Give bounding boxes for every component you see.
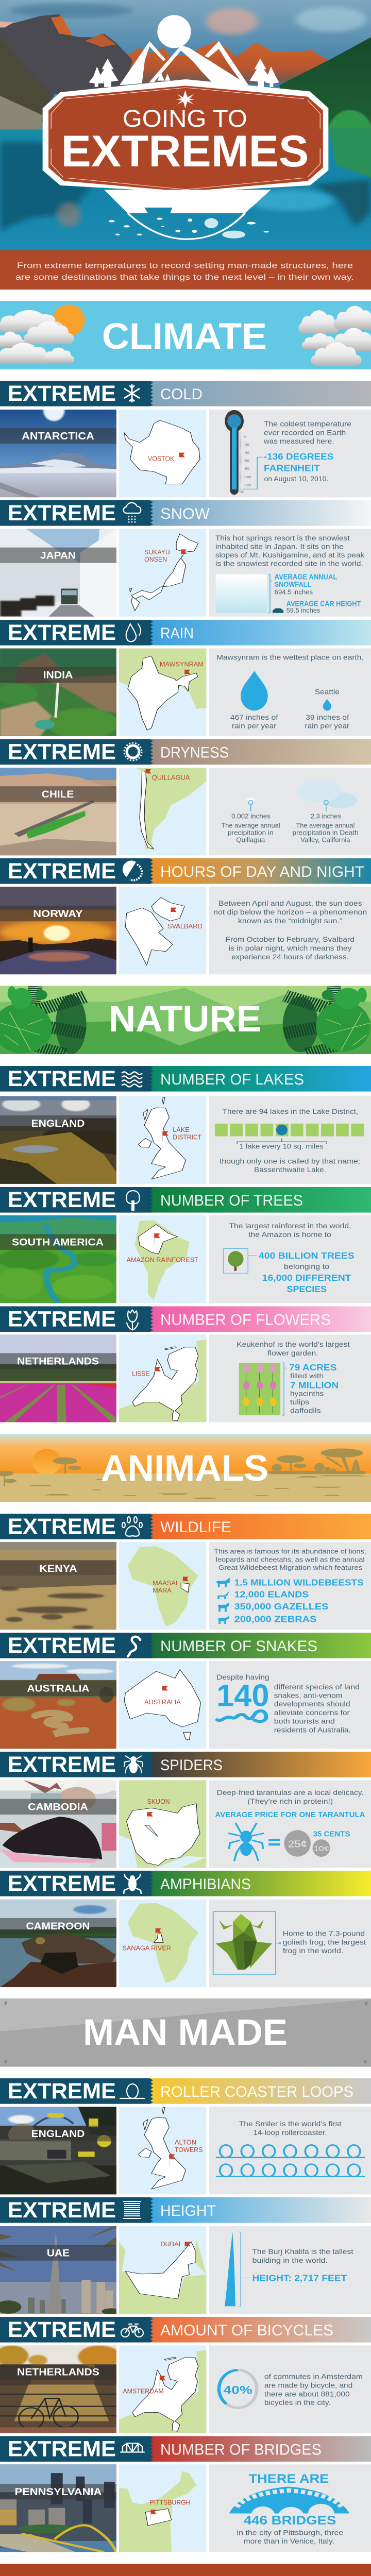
panel: spiders: 35 CENTS <box>313 1829 350 1838</box>
heading: Climate: CLIMATE <box>102 316 267 357</box>
band: extreme cold: EXTREME <box>8 381 116 406</box>
panel: coldest temperature: ever recorded on Earth <box>264 429 346 437</box>
band: extreme roller coaster loops: EXTREME <box>8 2079 116 2104</box>
bracket <box>237 1138 327 1144</box>
band: extreme snow <box>0 500 371 526</box>
snow depth bar <box>216 574 267 613</box>
panel: coldest temperature: -136 DEGREES <box>264 452 333 462</box>
photo: Antarctica: ANTARCTICA <box>22 430 94 442</box>
row: Kenya <box>0 1541 371 1630</box>
intro text band: are some destinations that take things to the next level – in their own way. <box>15 273 354 282</box>
band: extreme amphibians <box>0 1871 371 1896</box>
panel: snakes: developments should <box>274 1700 350 1708</box>
band: extreme cold <box>0 381 371 406</box>
garden plot <box>239 1363 287 1415</box>
band: extreme height <box>0 2197 371 2223</box>
row: Norway <box>0 887 371 975</box>
thermometer chart: -80 <box>244 467 249 470</box>
photo: rollercoaster: ENGLAND <box>31 2128 85 2139</box>
band: extreme dryness <box>0 739 371 765</box>
panel: snakes: alleviate concerns for <box>274 1709 350 1717</box>
band: extreme number of snakes <box>0 1633 371 1658</box>
photo: UAE: UAE <box>47 2247 70 2258</box>
band: extreme wildlife: EXTREME <box>8 1514 116 1539</box>
photo: England <box>0 1096 116 1184</box>
row: England rollercoaster <box>0 2107 371 2194</box>
icon: setting sun <box>32 1449 61 1475</box>
icon: snow cloud <box>123 503 141 524</box>
bracket <box>268 574 272 613</box>
photo: Antarctica <box>0 410 116 498</box>
panel: flowers: daffodils <box>290 1406 321 1415</box>
plants: right <box>283 986 371 1053</box>
map: Lisse <box>119 1334 206 1422</box>
row: Chile <box>0 768 371 855</box>
row: Netherlands flowers <box>0 1334 371 1422</box>
thermometer chart: -20 <box>244 444 249 447</box>
band: extreme hours of day and night: EXTREME <box>8 859 116 884</box>
panel: snakes: 140 <box>216 1679 269 1713</box>
photo: Norway: NORWAY <box>33 908 83 919</box>
band: extreme rain <box>0 620 371 646</box>
photo: Chile: CHILE <box>42 789 74 800</box>
panel: wettest place <box>209 648 371 736</box>
band: extreme amphibians: AMPHIBIANS <box>160 1876 251 1893</box>
map: India <box>119 648 206 736</box>
panel: driest place: 2.3 inches <box>311 813 341 820</box>
chart: 40 percent ring: 40% <box>223 2383 252 2396</box>
icon: truss bridge <box>121 2443 144 2452</box>
panel: flowers: filled with <box>290 1373 324 1380</box>
icon: tree <box>126 1191 140 1211</box>
icon: coins: 10¢ <box>313 1844 329 1853</box>
icons: wildlife silhouettes <box>216 1578 230 1624</box>
panel: snowiest site <box>209 529 371 617</box>
photo: Japan: JAPAN <box>40 550 76 561</box>
icon: small drop <box>323 699 331 711</box>
icon: sun <box>53 304 85 336</box>
band: extreme roller coaster loops: ROLLER COASTER LOOPS <box>160 2083 353 2100</box>
panel: snowiest site: 59.5 inches <box>286 607 320 614</box>
panel: flowers: 79 ACRES <box>289 1363 336 1372</box>
map: Dubai <box>119 2226 206 2314</box>
icon: tulip <box>127 1310 138 1330</box>
panel: driest place: 0.002 inches <box>231 813 271 820</box>
panel: bicycles <box>209 2345 371 2433</box>
band: extreme number of trees: EXTREME <box>8 1188 116 1212</box>
icon: snowflake <box>124 384 140 402</box>
chart: 14 loops <box>216 2145 365 2177</box>
band: extreme rain: EXTREME <box>8 620 116 645</box>
panel: snakes: both tourists and <box>274 1717 335 1725</box>
photo: Cameroon: CAMEROON <box>26 1920 90 1931</box>
chart: ten squares <box>215 1124 364 1137</box>
map: Antarctica: VOSTOK <box>148 455 175 463</box>
map: Skuon <box>119 1780 206 1868</box>
panel: bicycles: bicycles in the city. <box>264 2398 331 2406</box>
icon: snake <box>128 1637 140 1656</box>
panel: coldest temperature: on August 10, 2010. <box>264 474 328 483</box>
callout line <box>276 1942 281 1944</box>
panel: snakes: residents of Australia. <box>274 1726 351 1734</box>
band: extreme wildlife: WILDLIFE <box>160 1519 231 1536</box>
panel: trees: 16,000 DIFFERENT <box>262 1273 351 1283</box>
map: Maasai Mara: MAASAI <box>153 1580 177 1587</box>
panel: flowers: hyacinths <box>290 1389 324 1398</box>
map: Antarctica <box>119 410 206 498</box>
section banner: Animals <box>0 1434 371 1502</box>
panel: driest place: Valley, California <box>300 837 350 844</box>
band: extreme dryness: DRYNESS <box>160 744 229 761</box>
panel: bridges: THERE ARE <box>249 2472 329 2486</box>
band: extreme number of lakes: NUMBER OF LAKES <box>160 1071 304 1088</box>
map: Japan <box>119 529 206 617</box>
hero: mountain lake photo with badge <box>0 0 371 250</box>
row: Amsterdam <box>0 2345 371 2433</box>
panel: trees: the Amazon is home to <box>248 1230 331 1239</box>
icon: sun ring <box>124 743 142 760</box>
band: extreme dryness: EXTREME <box>8 740 116 765</box>
band: extreme cold: COLD <box>160 386 203 403</box>
panel: bridges: in the city of Pittsburgh, three <box>237 2529 343 2537</box>
clouds: right <box>298 306 371 366</box>
photo: Amsterdam <box>0 2345 121 2433</box>
panel: bridges <box>209 2464 371 2552</box>
title: Going to: GOING TO <box>123 105 247 132</box>
icon: bicycle <box>121 2324 143 2337</box>
section banner: Miscellaneous <box>0 2564 371 2576</box>
panel: wildlife: 12,000 ELANDS <box>234 1589 309 1600</box>
equals sign <box>268 1839 280 1845</box>
panel: wettest place: Seattle <box>315 688 340 696</box>
photo: Pittsburgh <box>0 2464 116 2552</box>
section banner: Climate <box>0 301 371 369</box>
icon: rain gauges <box>249 800 328 811</box>
photo: Australia <box>0 1661 116 1749</box>
section banner: Man Made <box>0 1998 371 2067</box>
icon: low-poly frog in box <box>213 1911 276 1974</box>
icon: compass star <box>176 90 194 108</box>
photo: Amsterdam: NETHERLANDS <box>17 2366 99 2378</box>
panel: height: building in the world. <box>252 2256 328 2264</box>
icon: building <box>123 2201 141 2218</box>
band: extreme height: EXTREME <box>8 2198 116 2223</box>
panel: height <box>209 2226 371 2314</box>
panel: midnight sun <box>209 887 371 974</box>
panel: trees: SPECIES <box>287 1284 327 1294</box>
map: Japan: SUKAYU <box>144 549 170 556</box>
icon: tarantula <box>228 1823 264 1861</box>
band: extreme spiders: EXTREME <box>8 1752 116 1777</box>
panel: bicycles: there are about 881,000 <box>264 2390 350 2398</box>
band: extreme snow: EXTREME <box>8 501 116 526</box>
map: Lake District: LAKE <box>173 1126 190 1133</box>
band: extreme spiders <box>0 1752 371 1777</box>
band: extreme number of snakes: NUMBER OF SNAKES <box>160 1638 317 1655</box>
map: Svalbard <box>119 887 206 975</box>
map: Pittsburgh <box>119 2464 206 2552</box>
map: Chile: QUILLAGUA <box>152 774 190 782</box>
panel: loops <box>209 2107 371 2194</box>
panel: lakes: Bassenthwaite Lake. <box>254 1166 326 1174</box>
map: Australia <box>119 1661 206 1749</box>
photo: Chile <box>0 768 116 855</box>
band: extreme number of trees <box>0 1187 371 1213</box>
map: Sanaga River: SANAGA RIVER <box>122 1945 171 1952</box>
icon: large drop <box>241 671 268 710</box>
panel: flowers: Keukenhof is the world's largest <box>237 1340 350 1348</box>
row: England lakes <box>0 1096 371 1184</box>
icon: coins <box>284 1830 330 1857</box>
photo: Japan <box>0 529 116 617</box>
panel: snowiest site: 694.5 inches <box>275 589 313 596</box>
panel: flowers: flower garden. <box>267 1349 318 1357</box>
thermometer chart: -100 <box>244 476 251 479</box>
band: extreme number of flowers: NUMBER OF FLOWERS <box>160 1312 331 1328</box>
map: Skuon: SKUON <box>147 1798 170 1805</box>
photo: rollercoaster <box>0 2107 116 2194</box>
logo: moon, peaks and trees <box>89 15 279 87</box>
section banner: Nature <box>0 986 371 1054</box>
heading: Nature: NATURE <box>109 999 261 1040</box>
band: extreme wildlife <box>0 1514 371 1539</box>
panel: bridges: 446 BRIDGES <box>244 2514 336 2528</box>
map: Amsterdam <box>119 2345 206 2433</box>
panel: trees: belonging to <box>284 1263 329 1270</box>
panel: midnight sun: known as the “midnight sun.” <box>238 917 342 925</box>
panel: wildlife: 200,000 ZEBRAS <box>234 1614 316 1624</box>
band: extreme number of lakes: EXTREME <box>8 1066 116 1091</box>
panel: wettest place: 39 inches of <box>306 714 349 721</box>
panel: spiders <box>209 1780 371 1868</box>
panel: coldest temperature <box>209 410 371 497</box>
panel: goliath frog: frog in the world. <box>283 1947 343 1955</box>
trees and animals silhouettes <box>0 1448 367 1499</box>
panel: bicycles: are made by bicycle, and <box>264 2381 352 2389</box>
panel: lakes <box>209 1096 371 1184</box>
band: extreme number of snakes: EXTREME <box>8 1633 116 1658</box>
panel: snowiest site: inhabited site in Japan. It sits on the <box>215 543 344 551</box>
panel: spiders: (They’re rich in protein!) <box>247 1797 333 1805</box>
icon: spider <box>124 1756 143 1773</box>
bracket <box>239 2232 250 2306</box>
panel: driest place: The average annual <box>221 822 280 829</box>
icon: frog <box>124 1874 141 1894</box>
band: extreme spiders: SPIDERS <box>160 1757 223 1774</box>
band: extreme number of bridges: NUMBER OF BRIDGES <box>160 2441 322 2459</box>
map: Australia: AUSTRALIA <box>144 1699 181 1706</box>
map: Alton Towers: ALTON <box>175 2139 196 2146</box>
band: extreme number of flowers <box>0 1307 371 1332</box>
thermometer chart: -120 <box>244 484 251 487</box>
photo: Kenya <box>0 1541 116 1630</box>
thermometer chart <box>225 410 263 495</box>
photo: Amazon <box>0 1215 116 1303</box>
row: Cambodia <box>0 1780 371 1868</box>
band: extreme amphibians: EXTREME <box>8 1871 116 1896</box>
map: Amsterdam: AMSTERDAM <box>123 2388 164 2395</box>
panel: wildlife: 350,000 GAZELLES <box>234 1602 328 1612</box>
map: Lisse: LISSE <box>132 1370 149 1378</box>
icon: coins: 25¢ <box>288 1839 307 1850</box>
panel: snakes: snakes, anti-venom <box>274 1691 342 1700</box>
icon: arched bridge <box>229 2486 349 2514</box>
map: Alton Towers <box>119 2107 206 2194</box>
photo: mountain lake <box>0 0 371 250</box>
photo: Australia: AUSTRALIA <box>27 1683 90 1694</box>
intro text band: From extreme temperatures to record-setting man-made structures, here <box>17 262 353 270</box>
icon: car <box>273 608 283 613</box>
thermometer chart: 0 <box>244 435 246 438</box>
panel: snowiest site: SNOWFALL <box>275 580 311 588</box>
panel: driest place: Quillagua <box>236 837 265 844</box>
band: extreme snow: SNOW <box>160 505 210 522</box>
plants: left <box>0 986 87 1054</box>
logo: boat and fish <box>104 190 271 239</box>
panel: coldest temperature: FARENHEIT <box>264 463 320 473</box>
row: India <box>0 648 371 736</box>
row: South America <box>0 1215 371 1303</box>
band: extreme rain: RAIN <box>160 625 194 642</box>
icon: loop <box>120 2084 144 2098</box>
row: Japan <box>0 529 371 617</box>
panel: flowers <box>209 1334 371 1422</box>
thermometer chart: -40 <box>244 451 249 454</box>
icon: Burj Khalifa <box>225 2232 235 2306</box>
clouds: left <box>0 310 75 364</box>
chart: 40 percent ring <box>219 2370 257 2408</box>
panel: flowers: 7 MILLION <box>290 1380 339 1391</box>
panel: driest place <box>209 768 371 855</box>
row: Australia <box>0 1661 371 1749</box>
map: Chile <box>119 768 206 855</box>
band: extreme hours of day and night <box>0 858 371 884</box>
map: Japan: ONSEN <box>144 556 167 563</box>
icon: clouds <box>246 779 357 808</box>
band: extreme number of lakes <box>0 1066 371 1092</box>
panel: goliath frog <box>209 1900 371 1987</box>
band: extreme number of flowers: EXTREME <box>8 1307 116 1331</box>
icon: sun and moon <box>123 860 142 880</box>
band: extreme number of bridges <box>0 2436 371 2462</box>
band: extreme amount of bicycles <box>0 2317 371 2343</box>
band: extreme number of trees: NUMBER OF TREES <box>160 1192 303 1209</box>
panel: wildlife <box>209 1542 371 1630</box>
photo: Norway <box>0 887 116 975</box>
photo: England: ENGLAND <box>31 1117 85 1129</box>
row: Pennsylvania <box>0 2464 371 2552</box>
panel: snowiest site: AVERAGE ANNUAL <box>275 572 337 581</box>
icon: tree in box <box>224 1249 257 1273</box>
photo: Kenya: KENYA <box>39 1563 77 1574</box>
photo: Cambodia <box>0 1780 206 1868</box>
map: Dubai: DUBAI <box>160 2241 180 2248</box>
photo: India <box>0 648 116 736</box>
heading: Man Made: MAN MADE <box>83 2012 288 2053</box>
map: Lake District <box>119 1096 206 1184</box>
photo: UAE <box>0 2226 121 2315</box>
band: extreme roller coaster loops <box>0 2078 371 2104</box>
panel: lakes: 1 lake every 10 sq. miles <box>240 1142 324 1150</box>
panel: wettest place: rain per year <box>232 722 277 730</box>
panel: trees <box>209 1215 371 1303</box>
panel: bridges: more than in Venice, Italy. <box>244 2537 334 2545</box>
icon: paw <box>122 1517 142 1536</box>
band: extreme hours of day and night: HOURS OF DAY AND NIGHT <box>160 863 364 880</box>
intro text band <box>0 250 371 290</box>
photo: Cameroon <box>0 1899 116 1988</box>
panel: coldest temperature: was measured here. <box>263 437 334 445</box>
icon: rain drops <box>126 624 141 641</box>
band: extreme amount of bicycles: AMOUNT OF BICYCLES <box>160 2322 333 2339</box>
row: UAE <box>0 2226 371 2315</box>
panel: flowers: tulips <box>290 1398 309 1406</box>
panel: wettest place: rain per year <box>305 722 350 730</box>
panel: snakes: Despite having <box>216 1673 269 1682</box>
panel: height: HEIGHT: 2,717 FEET <box>252 2273 347 2283</box>
panel: snakes <box>209 1661 371 1749</box>
map: Maasai Mara: MARA <box>153 1587 172 1595</box>
panel: driest place: precipitation in <box>228 829 274 837</box>
panel: loops: 14-loop rollercoaster. <box>253 2129 327 2137</box>
photo: India: INDIA <box>43 669 73 681</box>
photo: Cambodia: CAMBODIA <box>28 1801 88 1812</box>
map: Maasai Mara <box>119 1542 206 1630</box>
thermometer chart: -60 <box>244 460 249 463</box>
panel: coldest temperature: The coldest temperature <box>264 420 351 428</box>
panel: wettest place: 467 inches of <box>230 714 278 721</box>
heading: Animals: ANIMALS <box>101 1448 268 1489</box>
badge: rust octagon <box>43 79 328 193</box>
thermometer chart: °F <box>239 490 245 494</box>
row: Antarctica <box>0 410 371 498</box>
icon: snake <box>217 1711 266 1721</box>
map: Amazon <box>119 1215 206 1303</box>
panel: midnight sun: experience 24 hours of darkness. <box>231 953 349 961</box>
photo: tulip fields <box>0 1334 116 1422</box>
row: Cameroon <box>0 1899 371 1988</box>
map: Sanaga River <box>119 1899 206 1987</box>
icon: waves <box>122 1072 142 1087</box>
band: extreme height: HEIGHT <box>160 2202 216 2219</box>
band: extreme amount of bicycles: EXTREME <box>8 2317 116 2342</box>
band: extreme number of bridges: EXTREME <box>8 2437 116 2462</box>
panel: loops: The Smiler is the world’s first <box>239 2120 342 2128</box>
